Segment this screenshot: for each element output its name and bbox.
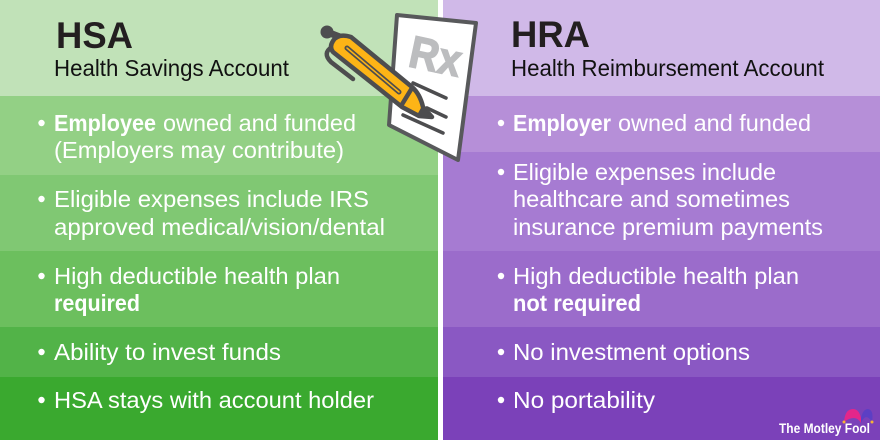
- icon: prescription paper: [389, 15, 476, 160]
- HSA row: eligible expenses: approved medical/vision/dental: [54, 214, 385, 240]
- HRA row: eligible expenses: [443, 152, 880, 251]
- HRA row: eligible expenses: insurance premium payments: [513, 214, 823, 240]
- HRA header: [443, 0, 880, 96]
- panel: HRA: [443, 0, 880, 440]
- HSA header: HSA: [56, 15, 133, 56]
- HSA row: portability: [0, 377, 438, 440]
- HRA row: portability: No portability: [513, 387, 656, 413]
- panel: HSA: [0, 0, 438, 440]
- HRA row: invest: No investment options: [513, 339, 750, 365]
- HRA row: ownership: [443, 96, 880, 152]
- HRA header: HRA: [511, 14, 590, 55]
- icon: pen: [320, 26, 432, 117]
- HRA row: invest: [443, 327, 880, 377]
- HRA row: deductible plan: [443, 251, 880, 327]
- HSA row: portability: HSA stays with account holder: [54, 387, 374, 413]
- HSA row: ownership: (Employers may contribute): [54, 137, 344, 163]
- HSA header: [0, 0, 438, 96]
- HRA row: eligible expenses: healthcare and sometimes: [513, 186, 790, 212]
- HRA row: eligible expenses: Eligible expenses include: [513, 159, 776, 185]
- HSA row: deductible plan: [0, 251, 438, 327]
- HRA row: deductible plan: not required: [513, 290, 641, 316]
- HSA row: deductible plan: required: [54, 290, 140, 316]
- HSA row: invest: Ability to invest funds: [54, 339, 281, 365]
- HSA row: eligible expenses: [0, 175, 438, 251]
- HRA row: deductible plan: High deductible health plan: [513, 263, 799, 289]
- HSA row: ownership: owned and funded: [163, 110, 356, 136]
- HSA row: ownership: Employee: [54, 110, 156, 136]
- HSA row: eligible expenses: Eligible expenses include IRS: [54, 186, 369, 212]
- HRA row: ownership: Employer: [513, 110, 611, 136]
- icon: prescription paper: Rx: [405, 26, 466, 87]
- HRA header: Health Reimbursement Account: [511, 55, 825, 81]
- HRA row: ownership: owned and funded: [618, 110, 811, 136]
- HSA header: Health Savings Account: [54, 55, 290, 81]
- HRA row: portability: [443, 377, 880, 440]
- HSA row: ownership: [0, 96, 438, 175]
- HSA row: invest: [0, 327, 438, 377]
- HSA row: deductible plan: High deductible health plan: [54, 263, 340, 289]
- logo: The Motley Fool: [779, 409, 874, 436]
